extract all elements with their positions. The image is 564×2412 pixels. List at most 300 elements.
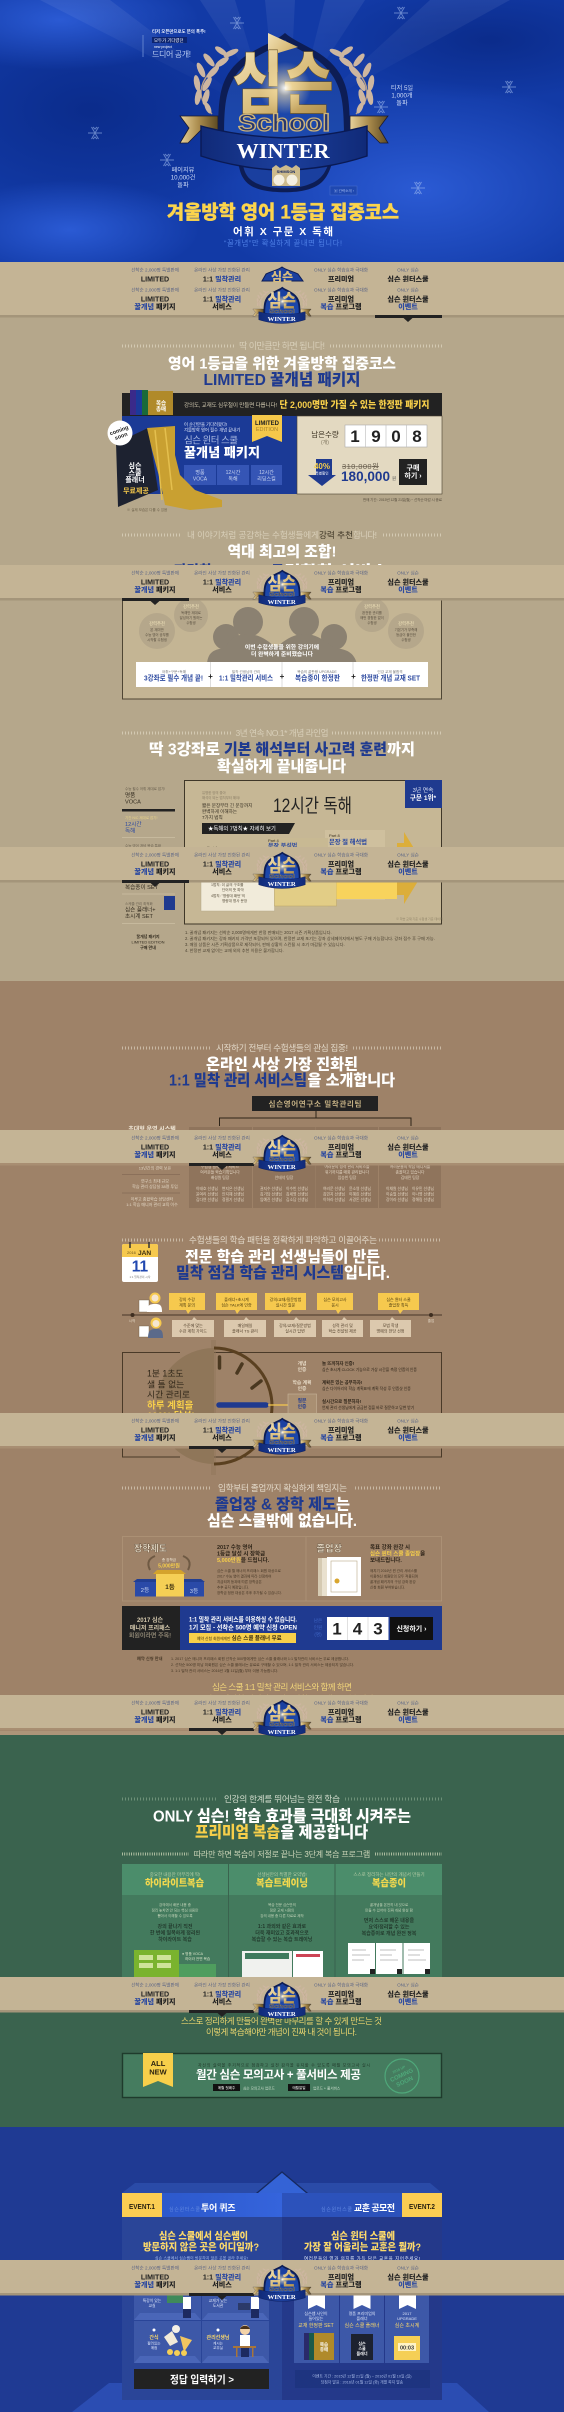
column heads: 선생님만의 특별한 요약법! [257, 1871, 307, 1878]
navigation bar 1: ONLY 심슨 [397, 266, 419, 272]
org column text: 이태호 선생님 [196, 1186, 218, 1191]
nav logo: WINTER [268, 316, 296, 323]
step copy: 4법칙: "명량대 패턴"의 [211, 893, 245, 898]
event dates: 이벤트 기간 : 2015년 12월 21일 (월) ~ 2016년 01월 10일 (일) [312, 2374, 412, 2378]
panel: package [108, 390, 443, 512]
quiz option: teachers room: 계시는 [213, 2340, 224, 2346]
navigation bar 9: 이벤트 [398, 2280, 418, 2289]
navigation bar 8: ONLY 심슨 [397, 1982, 419, 1988]
price: 310,000원 [342, 462, 379, 471]
hero logo: 심슨 [232, 47, 334, 123]
event 1 header [122, 2193, 236, 2217]
purchase guide link [131, 933, 165, 950]
certification list: 질문 [298, 1397, 307, 1404]
event 2 question: 여러분들의 열과 의지를 가득 담은 교훈을 지어주세요! [304, 2255, 420, 2262]
recommendation circles: 완전한 관리를 [362, 610, 382, 615]
navigation bar 8: 선착순 2,000명 특별판매 [131, 1982, 179, 1988]
quiz option: teachers room: 교무실 [213, 2345, 223, 2350]
closing line: green section [181, 2016, 382, 2037]
recommendation circles: 독해만 제대로 [181, 610, 201, 615]
section heading: recommendation: 역대 최고의 조합! [228, 542, 336, 560]
diploma copy: 심슨 윈터 스쿨 졸업장을 [370, 1550, 425, 1558]
nav logo [252, 570, 312, 607]
navigation bar 8: 이벤트 [398, 1997, 418, 2006]
org column text: 윤소영 선생님 [349, 1186, 371, 1191]
navigation bar 5: 꿀개념 패키지 [134, 1150, 176, 1159]
org column text: 여러분의 성적 관리 서비스를 [324, 1164, 370, 1169]
nav logo: School [269, 1157, 295, 1163]
benefit bar: 한정판 개념 교재 SET [361, 672, 420, 682]
student step text: 플래너+초시계 [224, 1296, 249, 1302]
nav logo: WINTER [268, 2011, 296, 2018]
apply button [390, 1617, 433, 1640]
section heading: lineup: 딱 3강좌로 [149, 740, 220, 758]
section heading: team: 온라인 사상 가장 진화된 [206, 1054, 358, 1074]
reservation copy: 1:1 밀착 관리 서비스를 이용하실 수 있습니다. [189, 1614, 297, 1624]
org column text: 수험생 밀착 관리 서비스 [201, 1164, 240, 1169]
teacher step text: 강의/교재/질문방법 [279, 1322, 311, 1328]
navigation bar 1: 심슨 [271, 270, 293, 284]
navigation bar 6: 꿀개념 패키지 [134, 1433, 176, 1442]
nav logo: 심슨 [268, 291, 296, 311]
navigation bar 3: 선착순 2,000명 특별판매 [131, 570, 179, 576]
org column text: 여러분들 학습기획입니다 [200, 1170, 240, 1174]
tab: reading: 12시간 [125, 820, 142, 828]
scholarship copy: 추후 공지 예정입니다. [217, 1584, 249, 1590]
prize grid [294, 2295, 429, 2363]
beige panel [297, 416, 442, 494]
navigation bar 6: 이벤트 [398, 1433, 418, 1442]
section heading: system: 입니다. [344, 1264, 390, 1282]
navigation bar 3: ONLY 심슨 학습효과 극대화 [314, 570, 369, 576]
black banner: 단 2,000명만 가질 수 있는 한정판 패키지 [280, 399, 430, 411]
section heading: premium review: 을 제공합니다 [280, 1822, 368, 1842]
review images [134, 1943, 430, 1980]
navigation bar 5: 선착순 2,000명 특별판매 [131, 1134, 179, 1142]
column body text: 요약/정리할 수 있는 [369, 1924, 410, 1930]
clock face [156, 1340, 288, 1475]
navigation bar 7: 온라인 사상 가장 진화된 관리 [194, 1700, 250, 1706]
navigation bar 9: 서비스 [212, 2280, 232, 2289]
panel: best combination [122, 585, 442, 699]
column body text: 정리 놓치면 안 되는 핵심 내용만 [152, 1908, 199, 1912]
podium [133, 1556, 205, 1596]
student step text: 졸업장 획득 [389, 1302, 409, 1308]
navigation bar 1 [0, 262, 564, 284]
silhouettes [207, 607, 357, 664]
column backgrounds [122, 1864, 442, 1977]
purchase guide link: LIMITED EDITION [131, 940, 165, 944]
org column text: 이수빈 선생님 [286, 1186, 308, 1191]
org column text: 서경돈 선생님 [349, 1197, 371, 1202]
navigation bar 6: 온라인 사상 가장 진화된 관리 [194, 1418, 250, 1424]
package copy [184, 421, 260, 460]
purchase guide link: 꿀개념 패키지 [136, 933, 160, 939]
org column text: 강이라 선생님 [386, 1197, 408, 1202]
navigation bar 7: 이벤트 [398, 1715, 418, 1724]
navigation bar 7: ONLY 심슨 학습효과 극대화 [314, 1700, 369, 1706]
stair steps [201, 830, 397, 911]
section heading: scholarship [122, 1482, 442, 1530]
benefit bar: 3강좌로 필수 개념 끝! [144, 672, 203, 682]
hero caption: “꿀개념”만 확실하게 끝내면 됩니다! [224, 238, 342, 248]
discount arrow: 40% [314, 462, 330, 471]
best seller corner: 구문 1위* [410, 793, 437, 802]
podium: 1등 [165, 1583, 175, 1591]
package copy: 심슨 윈터 스쿨 [184, 436, 238, 446]
navigation bar 5: 심슨 윈터스쿨 [387, 1142, 429, 1152]
navigation bar 4: LIMITED [141, 860, 169, 868]
limited edition ribbon [252, 415, 282, 442]
navigation bar 6: 서비스 [212, 1433, 232, 1442]
benefit bar: 밀착 선생님의 관리 [232, 669, 260, 674]
nav logo [252, 1134, 312, 1172]
diploma copy: 목표 강좌 완강 시 [370, 1543, 410, 1551]
section heading: premium review: 인강의 한계를 뛰어넘는 완전 학습 [224, 1793, 340, 1804]
nav logo [252, 286, 312, 324]
navigation bar 9 [0, 2260, 564, 2301]
section heading: system: 전문 학습 관리 선생님들이 만든 [185, 1247, 380, 1266]
banner copy: 매월 첫째주 [218, 2085, 236, 2090]
tab: reading: 독해 [125, 826, 135, 834]
student step text: 응시 [331, 1302, 339, 1308]
event 2 header: 교훈 공모전 [354, 2202, 395, 2213]
prize labels: 들어있는 [309, 2315, 324, 2321]
teaser stat: 10000: 돌파 [177, 181, 189, 189]
navigation bar 8: 온라인 사상 가장 진화된 관리 [194, 1982, 250, 1988]
remaining count: (개) [321, 439, 329, 446]
blue panel [122, 416, 297, 494]
navigation bar 4: 온라인 사상 가장 진화된 관리 [194, 852, 250, 858]
column body text: 강의에서 배운 내용 중 [159, 1902, 192, 1907]
event 1 header: EVENT.1 [129, 2204, 155, 2211]
section heading: recommendation [122, 529, 442, 580]
nav logo: School [269, 2287, 295, 2293]
benefit bar: + [351, 672, 356, 681]
prize images: 총매 [320, 2346, 328, 2353]
navigation bar 6: 선착순 2,000명 특별판매 [131, 1418, 179, 1424]
navigation bar 4: ONLY 심슨 [397, 852, 419, 858]
nav logo: 심슨 [268, 2269, 296, 2289]
column heads: 복습종이 [372, 1876, 406, 1890]
reservation notes: 예약 신청 안내 [137, 1655, 163, 1662]
left list: 학습 관리 상담실 38명 투입 [132, 1183, 178, 1189]
background: hero [0, 0, 564, 300]
navigation bar 5: LIMITED [141, 1144, 169, 1152]
navigation bar 7: 선착순 2,000명 특별판매 [131, 1700, 179, 1706]
student step text [179, 1296, 411, 1308]
navigation bar 6 [0, 1413, 564, 1454]
prize labels: 심슨 스쿨 플래너 [345, 2322, 379, 2329]
seats counter: (명) [314, 1631, 322, 1637]
prize images: 심슨 [358, 2340, 366, 2346]
navigation bar 3: 복습 프로그램 [320, 585, 362, 594]
description [202, 790, 252, 821]
left list: 13년간의 경력 보유 [139, 1164, 172, 1170]
column heads: 하이라이트복습 [145, 1876, 204, 1890]
package components: 12시간 [259, 469, 274, 476]
org column text: 정해림 선생님 [412, 1197, 434, 1202]
recommendation circles: 강력추천 [183, 603, 199, 610]
navigation bar 5: 이벤트 [398, 1150, 418, 1159]
background: tan section [0, 262, 564, 981]
column body text: 정문 교재 시험의 [270, 1908, 294, 1912]
stamp: coming soon: 2016 UP [392, 2065, 407, 2074]
nav logo [252, 852, 312, 889]
student step bubbles [169, 1293, 419, 1314]
column body text: 복습할 수 있는 복습 트레이닝 [252, 1936, 313, 1943]
benefit bar: + [280, 672, 285, 681]
package copy: 꿀개념 패키지 [184, 445, 260, 460]
reservation notes [137, 1655, 354, 1673]
navigation bar 4: 프리미엄 [328, 860, 354, 868]
banner: monthly mock exam [122, 2053, 442, 2098]
timeline: 시작 [129, 1318, 136, 1323]
tab: planner: 심슨 플래너+ [125, 906, 156, 914]
certification list: 심슨 초시계 CLOCK 기능으로 가상 시간을 측정 인증의 인증 [322, 1367, 417, 1372]
section heading: lineup: 3년 연속 NO.1* 개념 라인업 [236, 728, 328, 738]
prize labels: 2017 [403, 2311, 412, 2316]
icon: books: 복습 [156, 399, 166, 407]
snowflakes [88, 7, 516, 194]
panel bodies [122, 2193, 442, 2400]
quiz option: library: 도서관 [213, 2303, 224, 2308]
org column text: 이채원 선생님 [386, 1186, 408, 1191]
clock slogan: 시간 관리로 [147, 1390, 190, 1400]
navigation bar 2: 1:1 밀착관리 [203, 294, 241, 304]
seats counter: 4 [353, 1620, 363, 1638]
nav logo: WINTER [268, 1447, 296, 1454]
navigation bar 7: LIMITED [141, 1708, 169, 1716]
certification list: 학습 계획 [292, 1379, 312, 1386]
navigation bar 8: 꿀개념 패키지 [134, 1997, 176, 2006]
description: 짧은 문장부터 긴 문장까지 [202, 802, 252, 809]
column body text: 먼저 스스로 배운 내용을 [364, 1917, 414, 1924]
black banner: 강의도, 교재도 심우철이 만들면 다릅니다! [184, 401, 277, 409]
student step text: 심슨 윈터 스쿨 [386, 1296, 411, 1302]
icon: planner book with curtain: 스쿨 [129, 469, 142, 477]
hero logo [180, 33, 388, 192]
silhouette message: 이번 수험생들을 위한 강의기에 [245, 643, 319, 651]
student step text: 강의 수강 [179, 1296, 195, 1302]
navigation bar 1: 온라인 사상 가장 진화된 관리 [194, 266, 250, 274]
recommendation circles: 매번 경험한 없이 [360, 615, 384, 620]
navigation bar 3: LIMITED [141, 578, 169, 586]
answer button [134, 2369, 269, 2389]
pass label: 회원이라면 주목! [129, 1632, 171, 1640]
section heading: recommendation: 내 이야기처럼 공감하는 수험생들에게 [187, 529, 319, 540]
navigation bar 4: 복습 프로그램 [320, 867, 362, 876]
step copy: 단어의 뜻 파악 [222, 887, 245, 892]
navigation bar 9: 복습 프로그램 [320, 2280, 362, 2289]
teacher step text: 성적 관리 및 [332, 1322, 353, 1328]
buy button [399, 459, 427, 485]
section heading: system: 수험생들의 학습 패턴을 정확하게 파악하고 이끌어주는 [189, 1234, 377, 1245]
teaser stat: 1000: 1,000개 [391, 92, 413, 100]
prize labels: 교재 한정판 SET [298, 2322, 334, 2329]
prize images: 00:03 [400, 2346, 414, 2352]
clock slogan [147, 1368, 195, 1422]
title: 12시간 독해 [273, 795, 352, 817]
certification list: 인증 [298, 1366, 307, 1373]
scholarship copy: 2017 수능 영어 [217, 1543, 253, 1551]
icon: planner book with curtain [116, 426, 222, 512]
navigation bar 5: 프리미엄 [328, 1142, 354, 1152]
navigation bar 3: ONLY 심슨 [397, 570, 419, 576]
event 1 question: 심슨 스쿨에서 심슨쌤이 [159, 2230, 248, 2242]
nav logo [252, 1418, 312, 1455]
section heading: team [122, 1042, 442, 1090]
closing line: brown section: 심슨 스쿨 1:1 밀착 관리 서비스와 함께 하면 [212, 1682, 352, 1692]
navigation bar 4: 심슨 윈터스쿨 [387, 860, 429, 868]
recommendation circles: 강력추천 [398, 620, 414, 627]
hero logo: School [238, 110, 330, 137]
org column text: 김민지 선생님 [323, 1192, 345, 1196]
remaining count: 8 [412, 427, 422, 446]
navigation bar 2: 이벤트 [398, 302, 418, 311]
certification list [288, 1360, 417, 1416]
limited edition ribbon: EDITION [256, 427, 278, 433]
org column text: 이나영 선생님 [412, 1192, 434, 1196]
icon: planner book with curtain: 플래너 [125, 475, 145, 484]
navigation bar 9: 프리미엄 [328, 2272, 354, 2282]
recommendation circles: 기본기가 부족해 [395, 627, 417, 632]
black tag: ★독해의 7법칙★ 자세히 보기 [208, 824, 276, 832]
buy button: 구매 [407, 463, 419, 472]
answer button: 정답 입력하기 > [170, 2373, 234, 2386]
event 2 header: 심슨윈터스쿨 [321, 2206, 352, 2213]
calendar icon: JAN [138, 1250, 151, 1257]
navigation bar 9: 심슨 윈터스쿨 [387, 2272, 429, 2282]
navigation bar 8: LIMITED [141, 1990, 169, 1998]
recommendation circles: 본 재미만 [150, 627, 164, 632]
limited edition ribbon: LIMITED [255, 421, 280, 427]
diploma copy: 꿀개념 패키지의 구성 강좌 완강 [370, 1579, 417, 1584]
reservation notes: 3. 1:1 밀착 관리 서비스는 2016년 1월 11일(월) 부터 이용 가능합니다. [171, 1668, 278, 1673]
quiz option: teachers room [206, 2325, 256, 2357]
package copy: 이 순간만을 기다려왔다! [184, 421, 227, 428]
notes: 4. 한정판 교재 없이는 교재 외의 추천 이용은 불가합니다. [185, 947, 284, 954]
teacher step text: 수강 계획 가이드 [179, 1328, 207, 1334]
icon: planner book with curtain: 심슨 [129, 461, 142, 470]
teacher step text: 명예의 전당 선정 [377, 1328, 405, 1334]
recommendation circles: 수험생 [401, 637, 411, 642]
package components: 명품 [195, 469, 205, 476]
certification list: 늘 뜨끼하자 인증! [322, 1360, 355, 1367]
diploma copy: 신청 회원 부여받습니다. [370, 1584, 405, 1590]
silhouette message [245, 643, 319, 658]
column body text: 한 번에 일목하게 정리된 [150, 1930, 200, 1936]
quiz option: teachers room: 관리선생님 [206, 2334, 230, 2341]
section heading: limited package: 영어 1등급을 위한 겨울방학 집중코스 [168, 354, 396, 372]
podium: 3등 [190, 1588, 199, 1595]
column body text: 만들 수 있어야 진짜 개념 완성 함 [365, 1908, 414, 1912]
nav logo: School [269, 1722, 295, 1728]
org column text: 임승빈 팀장 [338, 1175, 357, 1180]
step copy: 1법칙: 이 글의 구조를 [211, 882, 244, 887]
event 2 question: 가장 잘 어울리는 교훈은 뭘까? [304, 2240, 421, 2254]
recommendation circles: 강력추천 [149, 620, 165, 627]
quiz option: classroom: 특강이 있는 [143, 2298, 162, 2303]
pass label: 매니저 프리패스 [130, 1624, 171, 1632]
org column text [196, 1164, 434, 1202]
section heading: team: 1:1 밀착 관리 서비스팀 [169, 1070, 307, 1090]
section heading: premium review [122, 1793, 442, 1842]
hero logo: SHIMSON [277, 169, 295, 174]
nav logo: 심슨 [268, 1704, 296, 1724]
tab: planner: 스케줄 관리 최적화 [125, 901, 153, 906]
review images: 하이라 전면 복습 [185, 1956, 211, 1961]
navigation bar 7: 복습 프로그램 [320, 1715, 362, 1724]
prize labels: UPGRADE [397, 2316, 417, 2321]
description: 유명한 양의 좋아 [202, 790, 227, 795]
section heading: recommendation: 합니다! [353, 530, 377, 540]
section heading: recommendation: 강력 추천 [319, 529, 353, 540]
navigation bar 5: 온라인 사상 가장 진화된 관리 [194, 1134, 250, 1142]
package components: 12시간 [226, 469, 241, 476]
org column text: 김태민 팀장 [401, 1175, 420, 1180]
scholarship title: 장학제도 [134, 1542, 168, 1554]
nav logo: 심슨 [268, 1986, 296, 2006]
quiz option: library [209, 2297, 259, 2318]
event 2 header [321, 2193, 442, 2217]
navigation bar 1: 프리미엄 [328, 274, 354, 284]
purchase guide link: 구매 안내 [140, 944, 156, 950]
discount arrow [308, 459, 336, 486]
teacher step text [179, 1322, 405, 1334]
benefit bar: 어휘+구문+독해 [162, 669, 186, 674]
hero subheadline: 어휘 X 구문 X 독해 [233, 225, 333, 238]
org column text: 김세영 선생님 [286, 1192, 308, 1196]
icon: student [139, 1292, 162, 1312]
benefit bar: 복습종이 한정판 [295, 672, 340, 682]
event 1 question [143, 2230, 259, 2260]
event 1 header: 심슨윈터스쿨 [169, 2206, 200, 2213]
icon: teacher [139, 1318, 163, 1338]
prize ribbons [308, 2295, 416, 2309]
prize images: 복습 [320, 2341, 328, 2348]
navigation bar 4: 이벤트 [398, 867, 418, 876]
icon: planner book with curtain: 무료제공 [123, 486, 149, 495]
navigation bar 2: 심슨 윈터스쿨 [387, 294, 429, 304]
remaining count: 9 [371, 427, 381, 446]
navigation bar 2: 복습 프로그램 [320, 302, 362, 311]
ribbon: all new: ALL [151, 2059, 166, 2068]
quiz option: snack bar: 팔려있는 [147, 2340, 161, 2346]
step copy: 명량대 명사 문장 [222, 898, 248, 903]
column body text: 강의 끝나기 직전 [158, 1923, 193, 1930]
teaser text: top left: 티저 오픈만으로도 문의 폭주! [152, 28, 206, 35]
event 1 question: 심슨 스쿨에서 심슨쌤이 방문하지 않은 곳을 골라 주세요! [155, 2256, 248, 2260]
navigation bar 2: LIMITED [141, 296, 169, 304]
nav logo: School [269, 874, 295, 880]
navigation bar 2: ONLY 심슨 [397, 286, 419, 292]
price: 원 [392, 475, 396, 481]
tab: voca [122, 786, 175, 812]
silhouette message: 더 완벽하게 준비했습니다 [251, 650, 314, 658]
column body text: 하이라이트 복습 [158, 1936, 192, 1943]
reservation copy [189, 1614, 297, 1643]
arrow [385, 832, 426, 904]
navigation bar 8: 심슨 윈터스쿨 [387, 1990, 429, 1998]
section heading: premium review: ONLY 심슨! 학습 효과를 극대화 시켜주는 [153, 1806, 411, 1826]
teaser stat: 1000 [391, 84, 413, 107]
column body text: 복습 전문 심슨만의 [268, 1902, 296, 1907]
navigation bar 5 [0, 1130, 564, 1171]
navigation bar 1: 1:1 밀착관리 [203, 274, 241, 284]
closing line: green section: 이렇게 복습해야만 개념이 진짜 내 것이 됩니다. [206, 2027, 357, 2037]
org column text: 여러분들의 학습 매니저를 [390, 1164, 431, 1169]
